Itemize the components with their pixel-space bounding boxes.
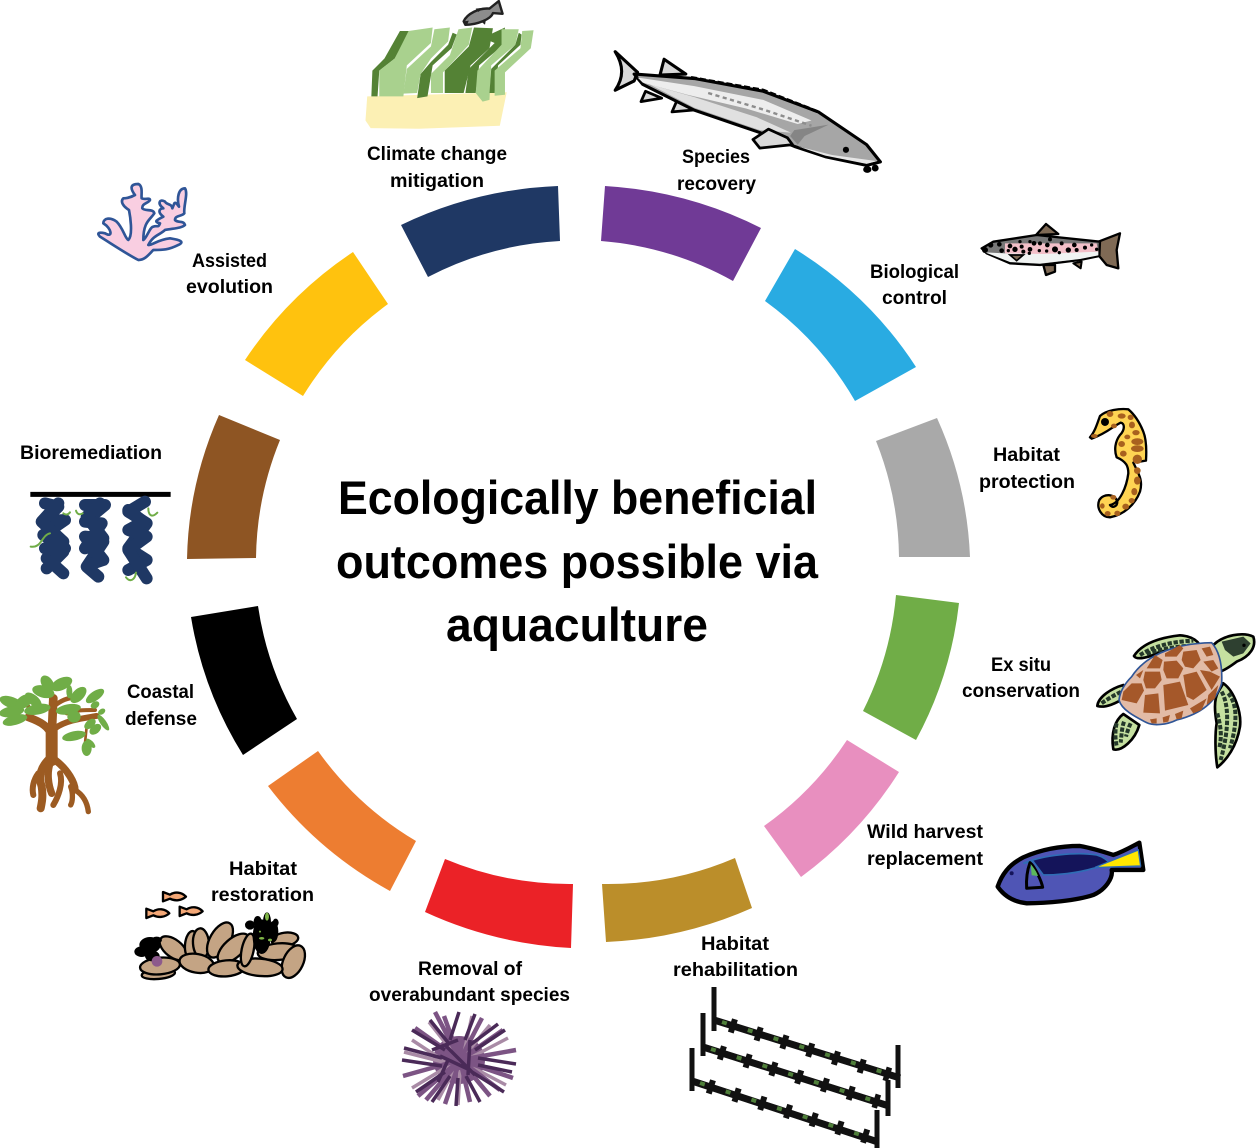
fish xyxy=(146,892,203,918)
label: assisted evolution: evolution xyxy=(186,276,273,298)
label: habitat protection xyxy=(979,444,1075,493)
label: coastal defense: Coastal xyxy=(127,681,194,703)
rack: bottom xyxy=(692,1048,878,1148)
segment: habitat rehabilitation xyxy=(602,858,752,942)
label: ex situ conservation: conservation xyxy=(962,680,1080,702)
oysters xyxy=(139,918,310,982)
mussel rope 2 xyxy=(85,503,105,577)
hanging threads and seaweed xyxy=(31,508,157,580)
icon: sea turtle xyxy=(1097,634,1254,767)
tail and fins xyxy=(615,52,638,90)
label: wild harvest replacement: replacement xyxy=(867,848,984,870)
segment: habitat protection xyxy=(876,418,970,557)
label: wild harvest replacement xyxy=(867,821,984,870)
pink urchin xyxy=(152,956,162,967)
eye xyxy=(843,147,849,153)
segment: biological control xyxy=(765,249,916,401)
title: aquaculture xyxy=(446,598,708,651)
label: bioremediation: Bioremediation xyxy=(20,442,162,464)
label: habitat restoration: restoration xyxy=(211,884,314,906)
label: removal of overabundant species xyxy=(369,958,570,1006)
body xyxy=(634,74,880,165)
segment: bioremediation xyxy=(187,415,280,559)
flippers and head xyxy=(1097,634,1254,767)
label: climate change mitigation: mitigation xyxy=(390,170,484,192)
label: habitat protection: protection xyxy=(979,471,1075,493)
title: outcomes possible via xyxy=(336,535,819,588)
pectoral fin xyxy=(753,129,793,148)
rack: middle xyxy=(703,1013,889,1116)
label: species recovery xyxy=(677,146,756,195)
label: assisted evolution: Assisted xyxy=(192,250,267,272)
icon: mangrove tree xyxy=(0,673,111,812)
icon: oyster reef with fish xyxy=(134,892,310,982)
icon: seahorse xyxy=(1090,409,1146,517)
mussel rope 3 xyxy=(128,502,147,578)
icon: blue tang fish xyxy=(998,843,1143,903)
icon: seaweed on sand with small fish xyxy=(365,1,534,129)
label: removal of overabundant species: overabundant species xyxy=(369,984,570,1006)
black mussels and seaweed xyxy=(134,912,279,961)
icon: coral restoration racks xyxy=(692,987,900,1148)
title xyxy=(336,471,819,651)
barbels xyxy=(863,165,879,173)
title: Ecologically beneficial xyxy=(338,471,817,524)
label: ex situ conservation xyxy=(962,654,1080,702)
label: climate change mitigation: Climate change xyxy=(367,143,507,165)
leaves xyxy=(0,673,111,756)
label: species recovery: Species xyxy=(682,146,750,168)
label: habitat rehabilitation xyxy=(673,933,798,981)
label: habitat restoration: Habitat xyxy=(229,858,298,880)
icon: purple sea urchin xyxy=(402,1012,516,1106)
icon: sturgeon xyxy=(615,52,880,173)
icon: trout xyxy=(982,224,1120,275)
segment: climate change mitigation xyxy=(401,186,560,277)
icon: small grey fish xyxy=(464,1,503,25)
rack: top xyxy=(714,987,900,1088)
label: removal of overabundant species: Removal of xyxy=(418,958,522,980)
label: biological control: control xyxy=(882,287,947,309)
segment: ex situ conservation xyxy=(863,595,959,740)
segment: assisted evolution xyxy=(245,252,388,396)
label: coastal defense: defense xyxy=(125,708,197,730)
label: habitat rehabilitation: Habitat xyxy=(701,933,770,955)
ring of coloured segments xyxy=(187,186,970,948)
roots and trunk xyxy=(28,697,97,812)
label: assisted evolution xyxy=(186,250,273,298)
icon: mussels on ropes xyxy=(30,494,171,580)
label: biological control: Biological xyxy=(870,261,959,283)
label: habitat rehabilitation: rehabilitation xyxy=(673,959,798,981)
segment: wild harvest replacement xyxy=(764,740,899,877)
suspension line xyxy=(30,487,171,502)
shell xyxy=(1119,643,1222,725)
label: coastal defense xyxy=(125,681,197,730)
mussel rope 1 xyxy=(42,503,65,573)
icon: pink coral xyxy=(98,184,186,260)
label: wild harvest replacement: Wild harvest xyxy=(867,821,983,843)
label: biological control xyxy=(870,261,959,309)
segment: coastal defense xyxy=(191,606,297,755)
label: ex situ conservation: Ex situ xyxy=(991,654,1051,676)
label: habitat protection: Habitat xyxy=(993,444,1061,466)
segment: habitat restoration xyxy=(268,751,416,891)
segment: removal of overabundant species xyxy=(425,859,573,948)
segment: species recovery xyxy=(601,186,761,281)
label: habitat restoration xyxy=(211,858,314,906)
label: climate change mitigation xyxy=(367,143,507,192)
label: species recovery: recovery xyxy=(677,173,756,195)
